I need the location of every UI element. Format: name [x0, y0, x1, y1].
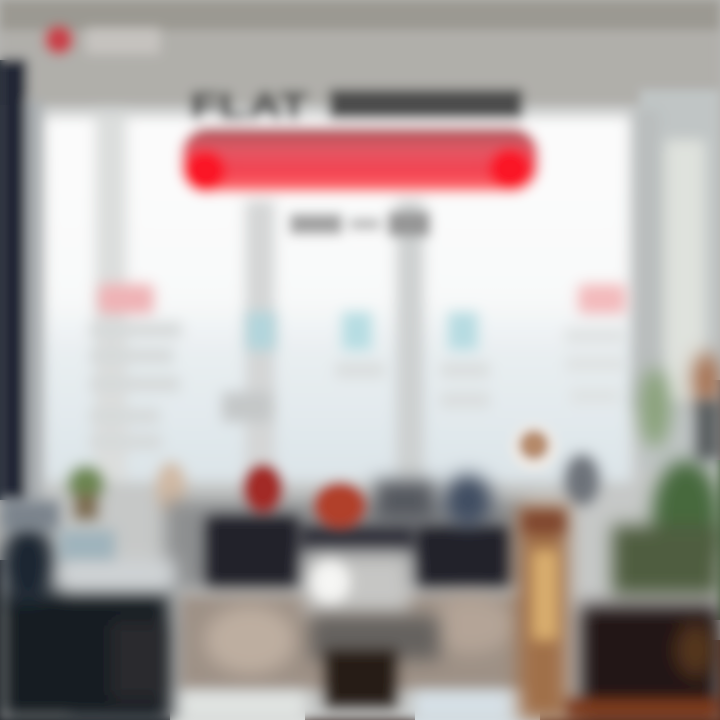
- light floor reflections: [70, 692, 540, 720]
- sofa: [165, 464, 525, 590]
- logo: [45, 26, 160, 54]
- subtitle: [290, 212, 430, 236]
- icon: teal marker three: [448, 312, 478, 350]
- dark left pillar: [0, 60, 42, 500]
- text block: right column: [565, 328, 625, 404]
- title: [190, 85, 522, 126]
- column heading: left red: [98, 284, 154, 314]
- armchair in the foreground left: [0, 500, 175, 720]
- wooden side panel: [518, 505, 568, 720]
- plant on the left sill: [68, 466, 104, 520]
- icon: teal marker one: [246, 312, 276, 350]
- text block: left column: [90, 322, 182, 450]
- column heading: right red: [578, 284, 626, 314]
- title: FLAT: [190, 85, 308, 126]
- side lamp base: [564, 454, 600, 506]
- potted plant on the right: [565, 352, 720, 720]
- vase: [156, 462, 186, 514]
- wall clock: [511, 424, 557, 470]
- icon: teal marker two: [342, 312, 372, 350]
- window panes: [44, 110, 705, 482]
- floor and rug: [180, 595, 530, 690]
- text block: centre columns: [222, 362, 490, 422]
- coffee table: [305, 555, 440, 708]
- red banner: [182, 128, 538, 192]
